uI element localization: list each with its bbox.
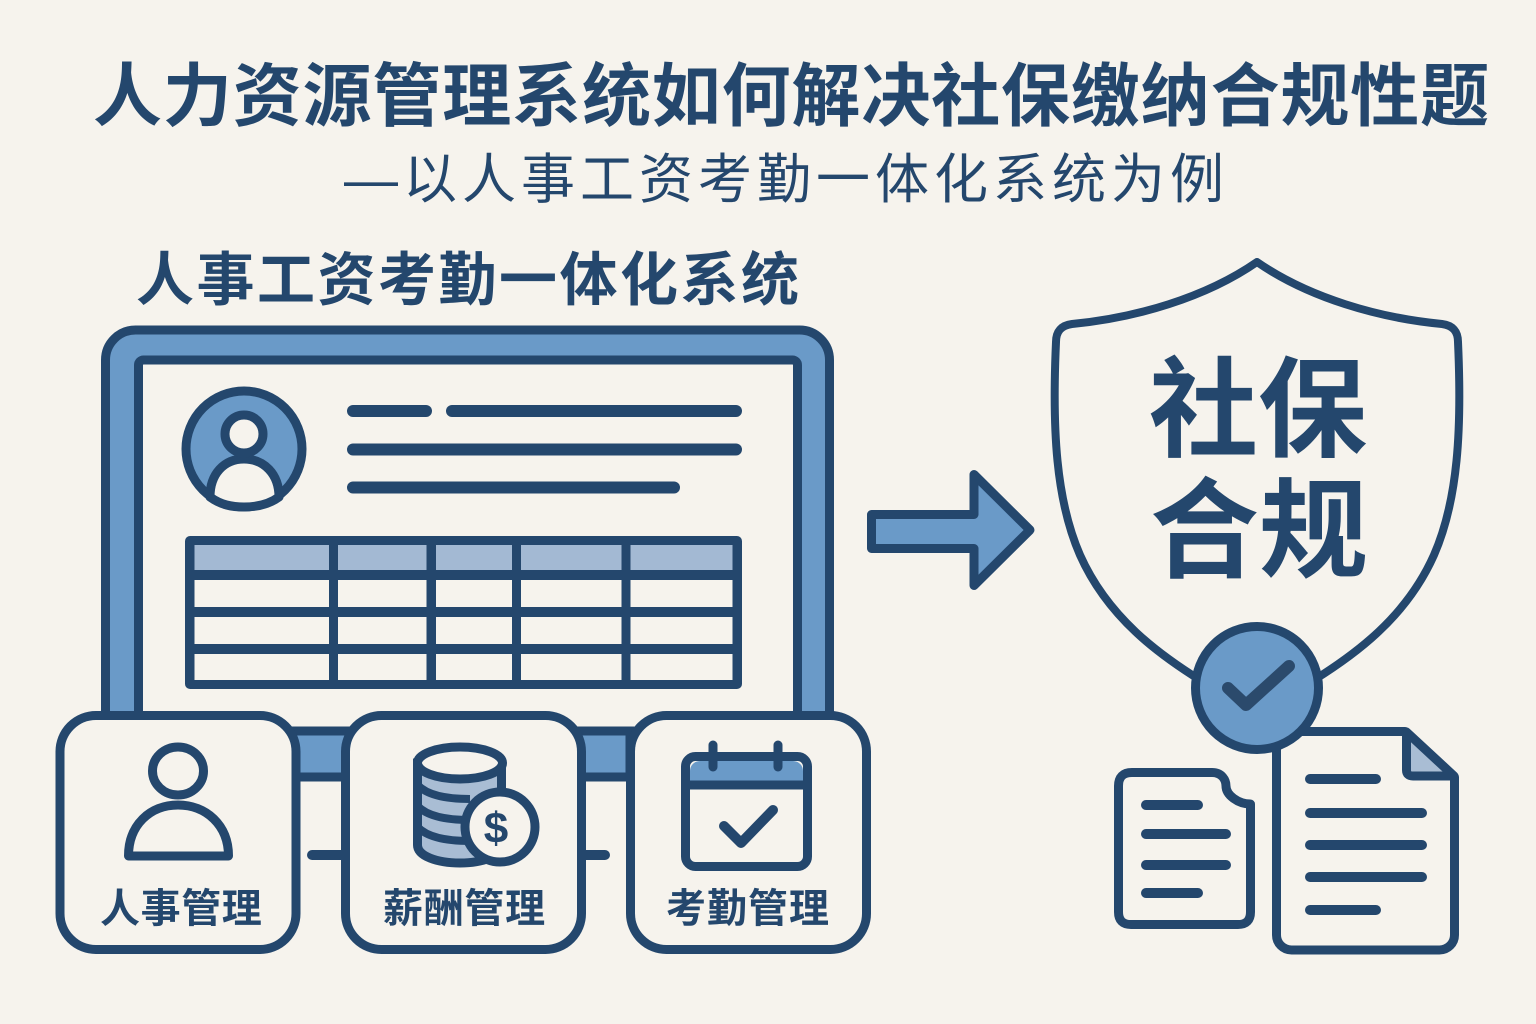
table base xyxy=(185,536,742,689)
table row 1 xyxy=(194,580,732,607)
label: 考勤管理 xyxy=(666,887,830,931)
table row 3 xyxy=(194,654,732,680)
calendar peg right xyxy=(774,745,782,767)
line 3 xyxy=(353,482,674,494)
large document xyxy=(1276,732,1454,950)
label: 薪酬管理 xyxy=(383,887,546,931)
cylinder top xyxy=(418,747,502,779)
folded corner xyxy=(1406,732,1454,776)
connector right xyxy=(582,850,605,860)
monitor screen xyxy=(138,360,798,800)
document sheet xyxy=(1276,732,1454,950)
person head xyxy=(152,747,204,795)
small document xyxy=(1118,772,1250,924)
arrow xyxy=(872,474,1030,586)
shield text xyxy=(1149,350,1368,593)
check mark xyxy=(1228,666,1289,705)
card frame xyxy=(60,716,296,950)
calendar peg left xyxy=(708,745,718,767)
table header cells xyxy=(194,545,732,570)
line 1 short xyxy=(353,405,426,417)
coin xyxy=(465,792,535,862)
document sheet xyxy=(1118,772,1250,924)
icon: person xyxy=(128,747,228,856)
document lines xyxy=(1146,805,1226,893)
document lines xyxy=(1310,779,1422,910)
dollar sign: $ xyxy=(484,804,508,853)
heading: integrated system: 人事工资考勤一体化系统 xyxy=(136,248,802,313)
card: attendance management xyxy=(630,716,866,950)
calendar header xyxy=(690,761,803,781)
calendar divider xyxy=(686,780,807,790)
line 2 xyxy=(353,444,736,456)
title: 人力资源管理系统如何解决社保缴纳合规性题 xyxy=(93,58,1490,135)
avatar xyxy=(186,391,302,507)
card frame xyxy=(630,716,866,950)
card: payroll management xyxy=(346,716,582,950)
person body xyxy=(128,805,228,856)
cylinder body xyxy=(418,763,502,863)
avatar body xyxy=(210,459,279,507)
data table xyxy=(185,536,742,689)
icon: database and coin xyxy=(418,747,535,863)
monitor frame xyxy=(106,330,830,800)
badge circle xyxy=(1196,626,1318,750)
calendar body xyxy=(686,756,808,866)
shield xyxy=(1055,262,1459,680)
connector left xyxy=(312,850,345,860)
line 1 long xyxy=(452,405,736,417)
avatar disc xyxy=(186,391,302,507)
shield text line 1: 社保 xyxy=(1149,350,1367,472)
avatar head xyxy=(225,415,263,453)
shield text line 2: 合规 xyxy=(1150,471,1368,593)
card frame xyxy=(346,716,582,950)
card: HR management xyxy=(60,716,296,950)
profile text lines xyxy=(353,411,736,488)
icon: calendar xyxy=(686,745,808,866)
panel: monitor xyxy=(100,330,840,855)
calendar check xyxy=(724,810,773,843)
cylinder bands xyxy=(418,785,470,841)
subtitle: —以人事工资考勤一体化系统为例 xyxy=(344,150,1229,210)
compliance check badge xyxy=(1196,626,1318,750)
monitor base bar xyxy=(290,731,630,777)
area under the base xyxy=(100,782,840,842)
table row 2 xyxy=(194,617,732,644)
label: 人事管理 xyxy=(100,887,262,931)
